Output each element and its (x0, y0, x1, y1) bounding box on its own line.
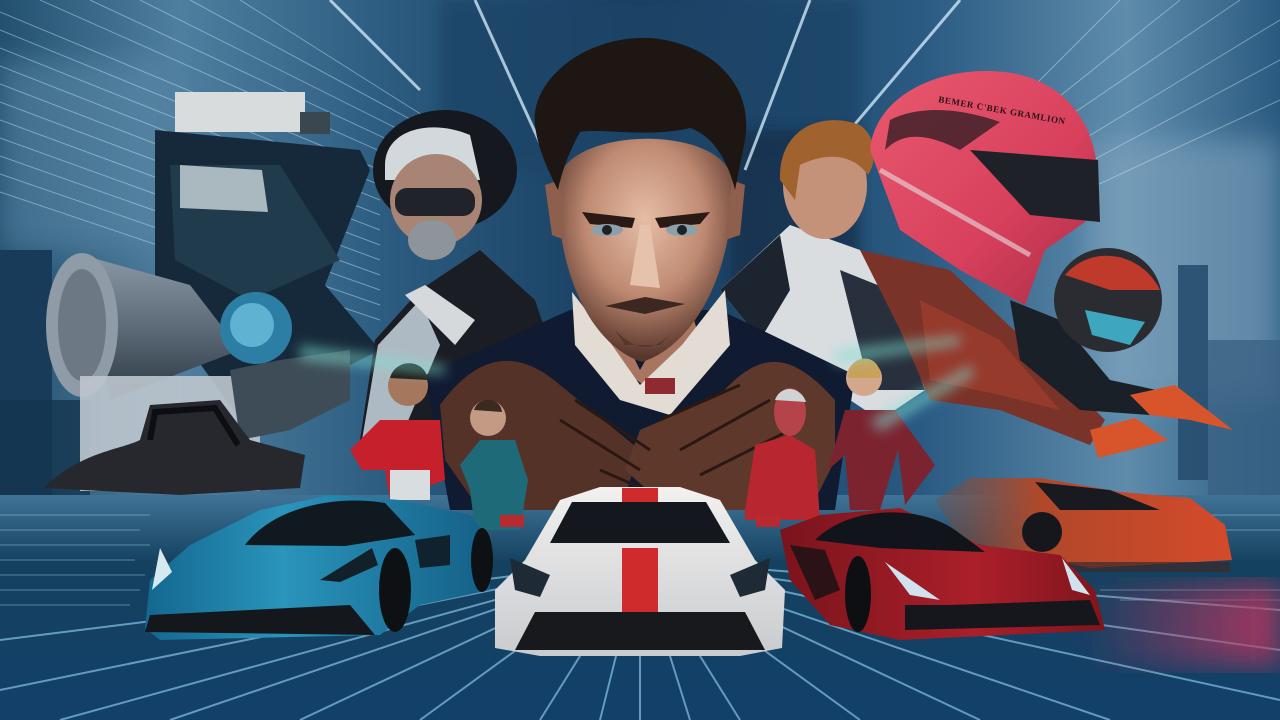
machinery: aero duct and engine block (44, 92, 380, 495)
small figure: woman in red top (828, 358, 935, 510)
red race car (780, 508, 1105, 640)
person: central driver (425, 38, 855, 510)
blue race car (145, 495, 493, 640)
white race car (495, 487, 785, 656)
person: goggled technician (360, 110, 545, 440)
small figure: red shirt man (350, 363, 445, 500)
icon: pink racing helmet (870, 71, 1100, 305)
orange rear car (935, 478, 1232, 572)
small figure: red masked suit (745, 388, 820, 520)
person: helmeted driver with orange gloves (860, 248, 1233, 458)
helmet text: BEMER C'BEK GRAMLION (938, 94, 1066, 126)
light beams (300, 335, 975, 432)
small figure: teal jacket man (460, 400, 528, 530)
person: blond driver (720, 120, 925, 420)
road with speed lines (0, 495, 1280, 720)
